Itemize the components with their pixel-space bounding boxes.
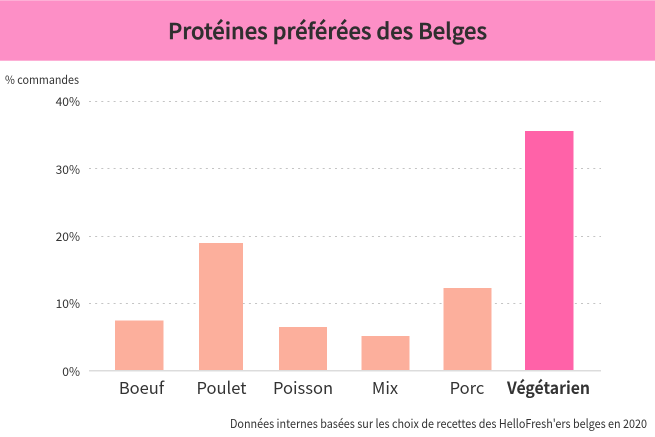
x axis labels: Végétarien [506, 375, 590, 399]
x axis labels: Mix [372, 375, 398, 399]
x axis baseline [89, 370, 601, 372]
x axis labels [119, 375, 590, 399]
bar chart [115, 131, 574, 371]
bar: Poulet [199, 243, 243, 371]
x axis labels: Poisson [273, 375, 333, 399]
y axis labels: 0% [62, 363, 80, 380]
y axis labels: 40% [56, 93, 80, 110]
x axis labels: Poulet [197, 375, 246, 399]
y axis title: % commandes [5, 72, 79, 88]
bar: Végétarien [525, 131, 574, 371]
y axis labels: 10% [56, 295, 80, 312]
y axis labels: 30% [56, 161, 80, 178]
y axis labels [56, 93, 80, 380]
title: Protéines préférées des Belges [168, 14, 487, 46]
bar: Porc [444, 288, 492, 371]
y axis labels: 20% [56, 228, 80, 245]
bar: Boeuf [115, 320, 164, 371]
header banner [0, 0, 655, 61]
bar: Poisson [279, 327, 327, 371]
x axis labels: Porc [450, 375, 484, 399]
bar: Mix [362, 336, 410, 371]
x axis labels: Boeuf [119, 375, 165, 399]
